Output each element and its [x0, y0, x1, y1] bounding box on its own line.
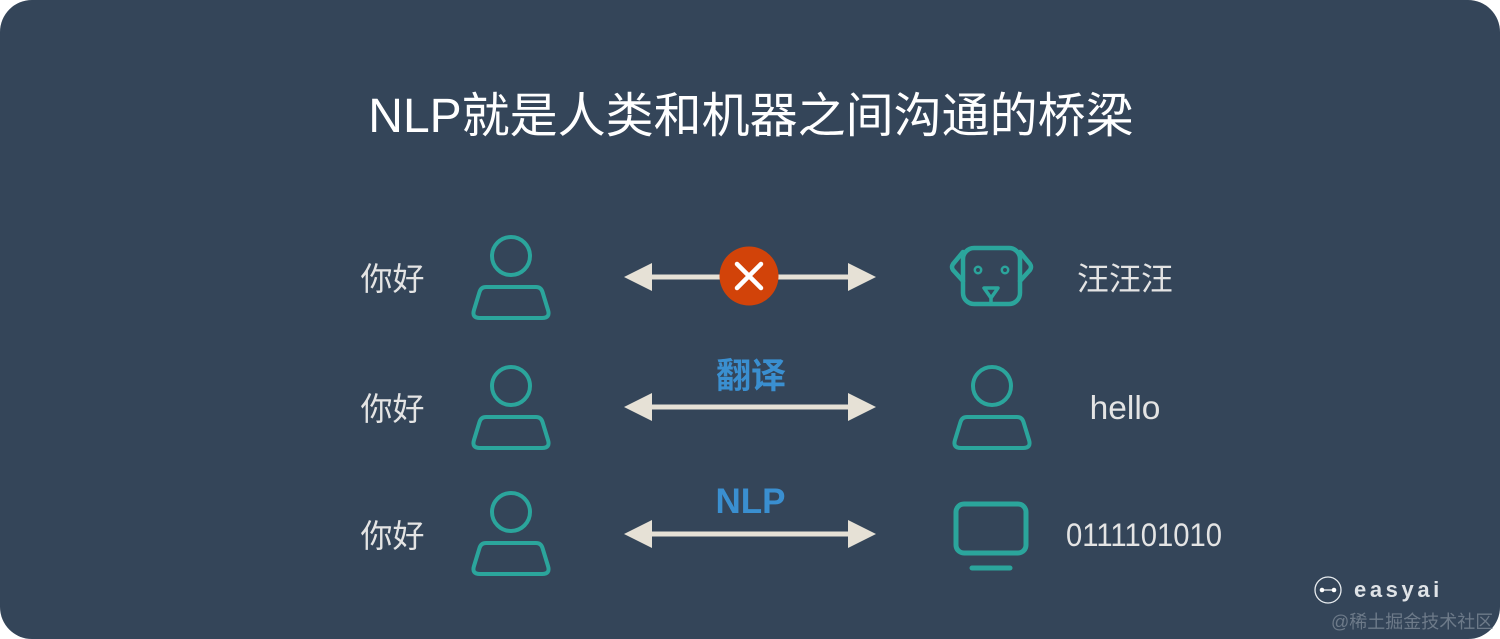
text: easyai: easyai: [1354, 577, 1443, 602]
text: 你好: 你好: [360, 518, 425, 554]
text: 你好: 你好: [360, 391, 425, 427]
row 3: NLP between human and computer: [360, 482, 1222, 574]
icon: computer monitor: [956, 504, 1026, 568]
row 2: translation between people: [360, 357, 1160, 448]
icon: logo mark: [1315, 577, 1341, 603]
arrow: double-headed: [624, 520, 876, 548]
icon: person: [473, 493, 549, 574]
text: 汪汪汪: 汪汪汪: [1077, 261, 1173, 297]
icon: dog: [952, 248, 1031, 304]
text: binary: 0111101010: [1066, 517, 1222, 553]
arrow: double-headed: [624, 393, 876, 421]
watermark: @稀土掘金技术社区: [1331, 612, 1493, 632]
text: hello: hello: [1090, 390, 1160, 427]
text: 你好: 你好: [360, 261, 425, 297]
icon: person: [473, 367, 549, 448]
label: NLP: NLP: [716, 482, 786, 521]
icon: person: [954, 367, 1030, 448]
logo: easyai: [1315, 577, 1443, 603]
label: 翻译: 翻译: [716, 357, 786, 396]
title: NLP就是人类和机器之间沟通的桥梁: [368, 90, 1134, 143]
icon: red cross: [720, 246, 778, 306]
arrow: double-headed: [624, 263, 876, 291]
icon: person: [473, 237, 549, 318]
row 1: human and dog cannot communicate: [360, 237, 1173, 318]
